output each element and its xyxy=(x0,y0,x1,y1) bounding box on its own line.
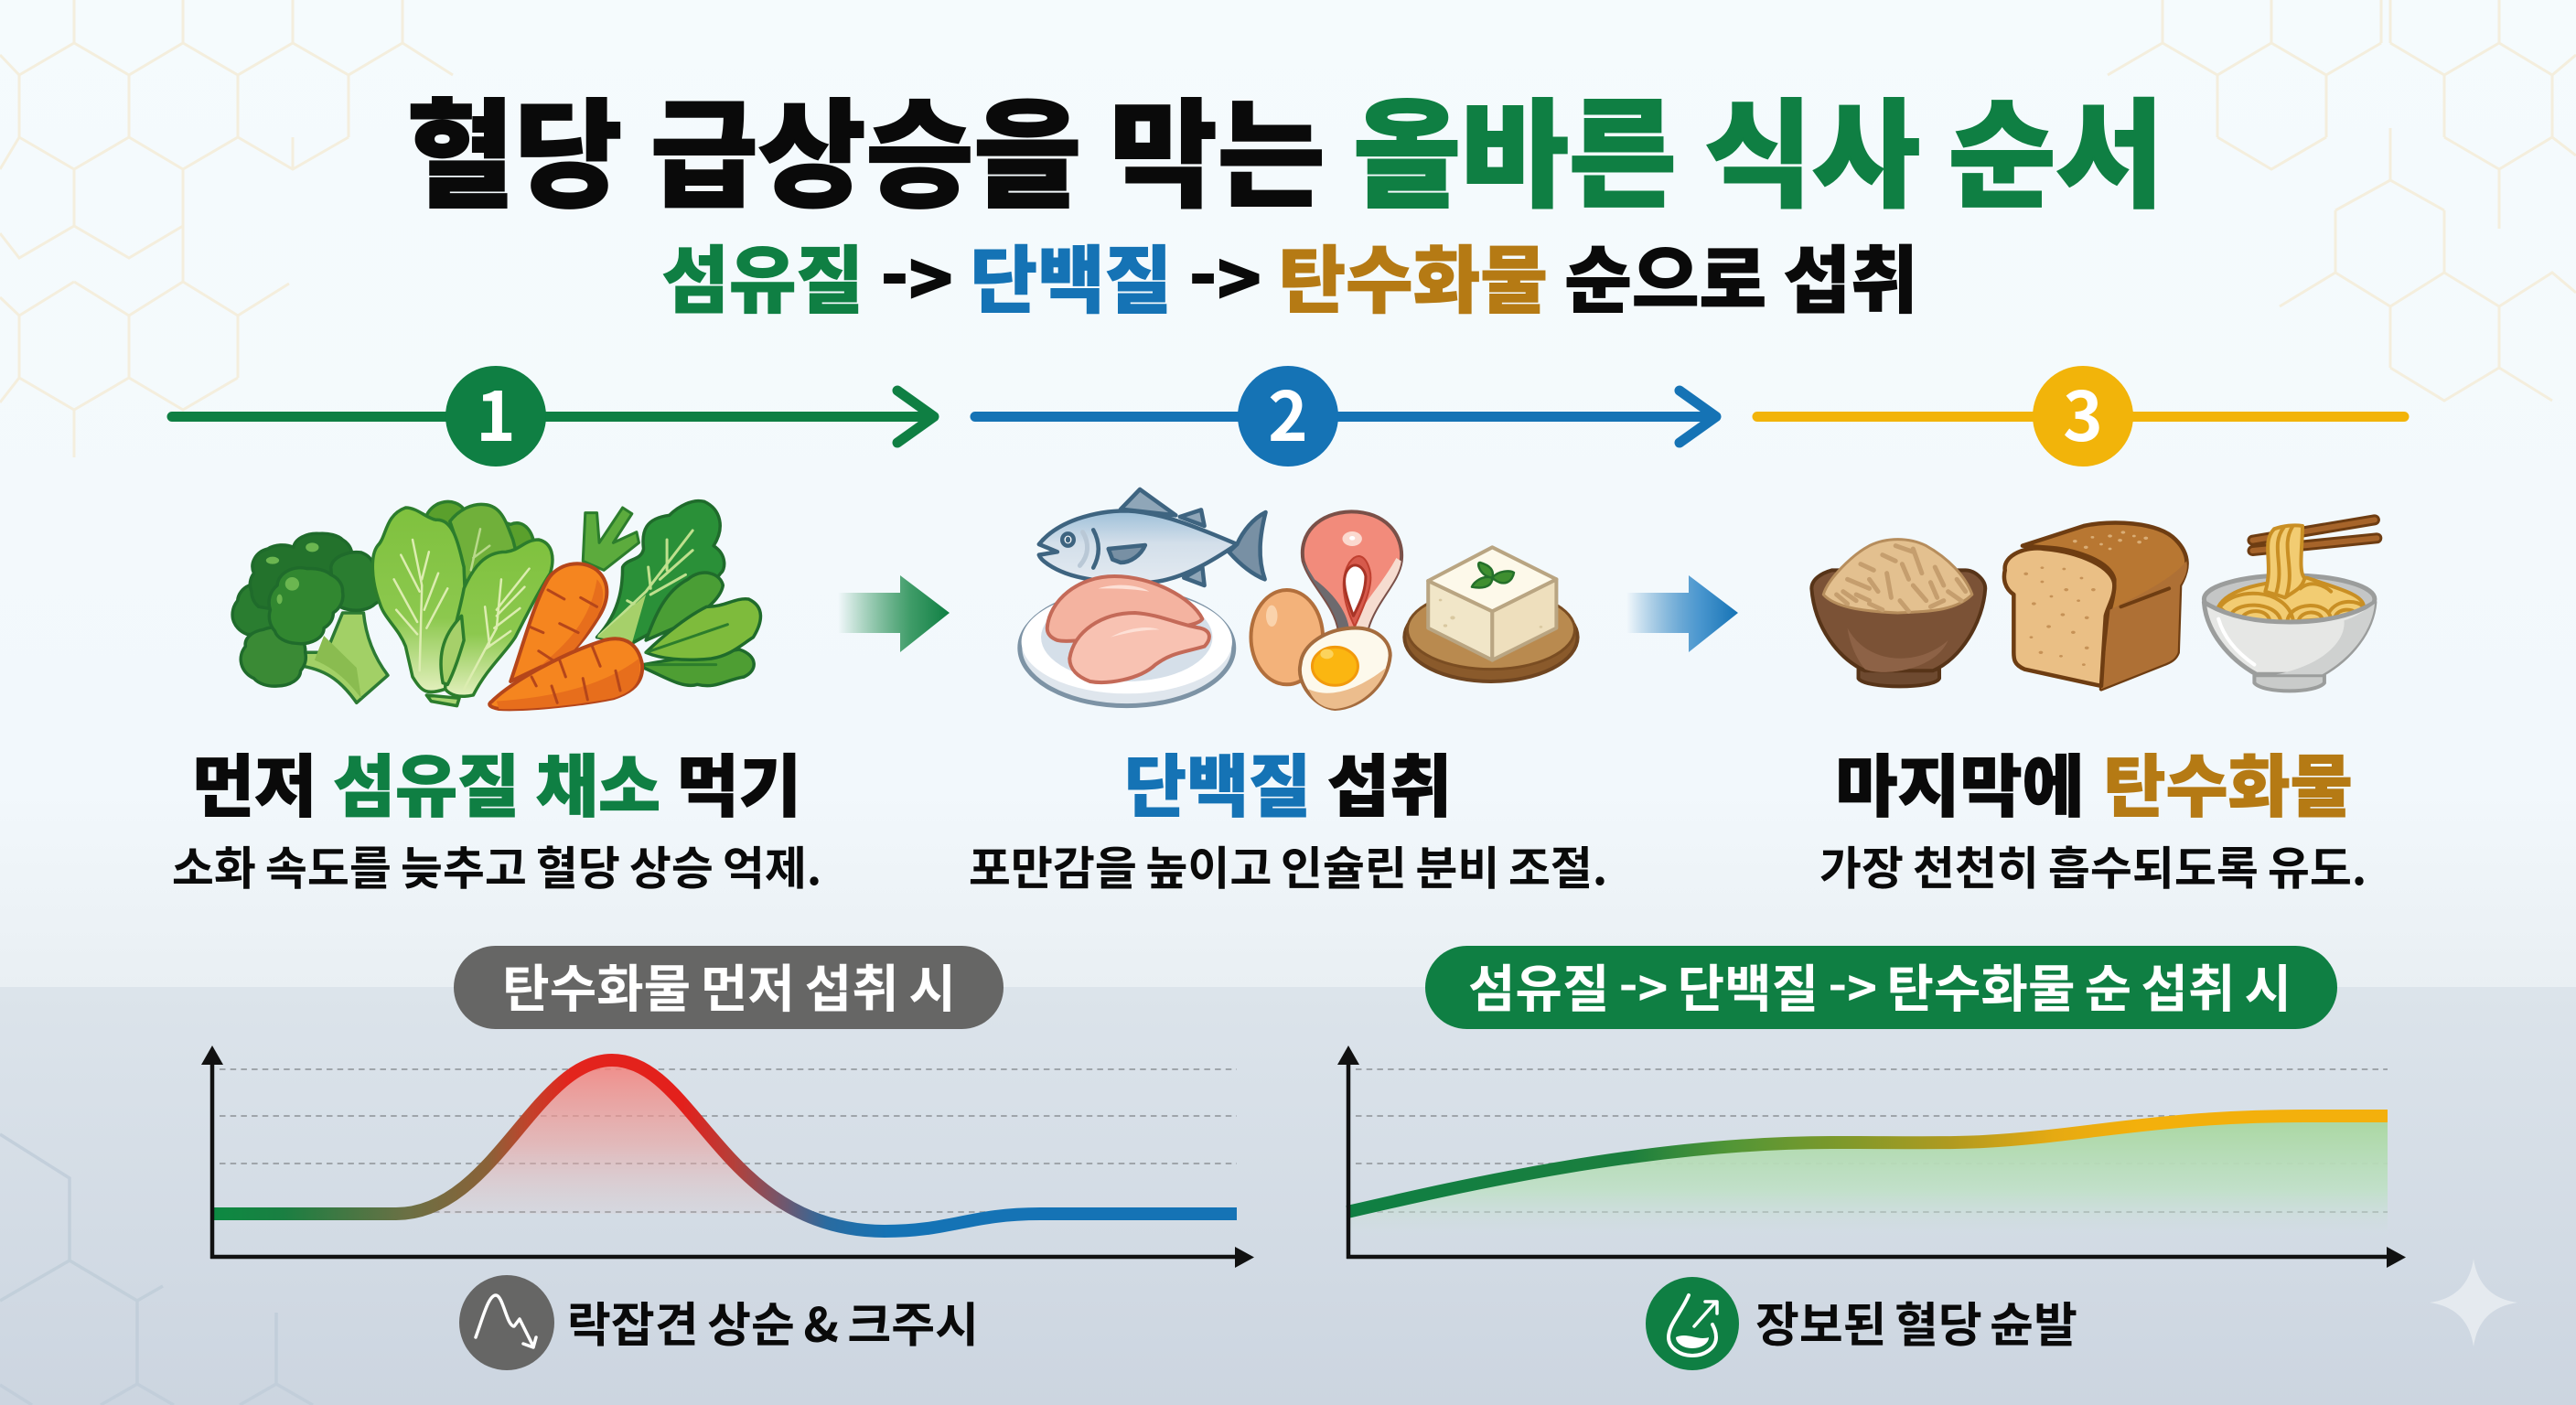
step 1 timeline arrow xyxy=(172,363,934,467)
step 1 timeline arrow: 1 xyxy=(476,363,516,461)
chopsticks xyxy=(2252,520,2377,551)
step 1 heading: 먼저 섬유질 채소 먹기 xyxy=(192,733,801,831)
label: stable result: 장보된 혈당 슌발 xyxy=(1755,1287,2077,1356)
leafy greens xyxy=(597,501,760,686)
step 1 description: 소화 속도를 늦추고 혈당 상승 억제. xyxy=(172,832,821,898)
carrots xyxy=(489,563,642,709)
step 3 description: 가장 천천히 흡수되도록 유도. xyxy=(1819,832,2367,898)
plate xyxy=(1020,590,1234,706)
tofu xyxy=(1428,547,1556,660)
bread xyxy=(2023,522,2187,689)
step 3 heading: 마지막에 탄수화물 xyxy=(1835,733,2353,831)
icon: stable glucose drop xyxy=(1646,1277,1739,1370)
decorative sparkle xyxy=(2430,1259,2517,1346)
panel: correct order pill: 섬유질 -> 단백질 -> 탄수화물 순 섭취 시 xyxy=(1468,949,2292,1023)
chart: correct order stable glucose xyxy=(1337,1046,2406,1268)
step 2 timeline arrow xyxy=(975,363,1716,467)
step 3 timeline: 3 xyxy=(2063,363,2103,461)
step 2 description: 포만감을 높이고 인슐린 분비 조절. xyxy=(969,832,1607,898)
step 2 heading: 단백질 섭취 xyxy=(1124,733,1452,831)
arrow: step 1 to 2 xyxy=(838,575,950,652)
chart: carbohydrate first glucose spike xyxy=(201,1046,1254,1268)
noodle bowl xyxy=(2204,575,2375,623)
subtitle: 섬유질 -> 단백질 -> 탄수화물 순으로 섭취 xyxy=(661,222,1918,328)
broccoli xyxy=(232,533,388,702)
icon: spike and crash xyxy=(459,1275,554,1370)
noodles xyxy=(2218,578,2364,624)
icon: protein foods xyxy=(1020,489,1578,709)
rice bowl xyxy=(1859,670,1939,686)
arrow: step 2 to 3 xyxy=(1626,575,1738,652)
icon: carbohydrate foods xyxy=(1811,520,2377,691)
background: upper area xyxy=(0,0,2576,987)
halved egg xyxy=(1300,628,1390,709)
carrot greens xyxy=(583,508,639,570)
label: spike result: 락잡견 상순 & 크주시 xyxy=(567,1287,979,1356)
step 3 timeline xyxy=(1757,363,2404,467)
lettuce xyxy=(372,501,553,706)
step 2 timeline arrow: 2 xyxy=(1268,363,1308,461)
basil xyxy=(1472,563,1514,587)
icon: vegetables xyxy=(232,501,760,709)
whole egg xyxy=(1250,590,1323,684)
salmon steak xyxy=(1303,511,1401,631)
title: 혈당 급상승을 막는 올바른 식사 순서 xyxy=(407,61,2163,231)
panel: carbohydrate first pill: 탄수화물 먼저 섭취 시 xyxy=(502,949,956,1023)
background: lower band xyxy=(0,987,2576,1405)
chicken xyxy=(1047,576,1202,641)
wooden board xyxy=(1404,593,1578,681)
fish xyxy=(1039,489,1266,585)
